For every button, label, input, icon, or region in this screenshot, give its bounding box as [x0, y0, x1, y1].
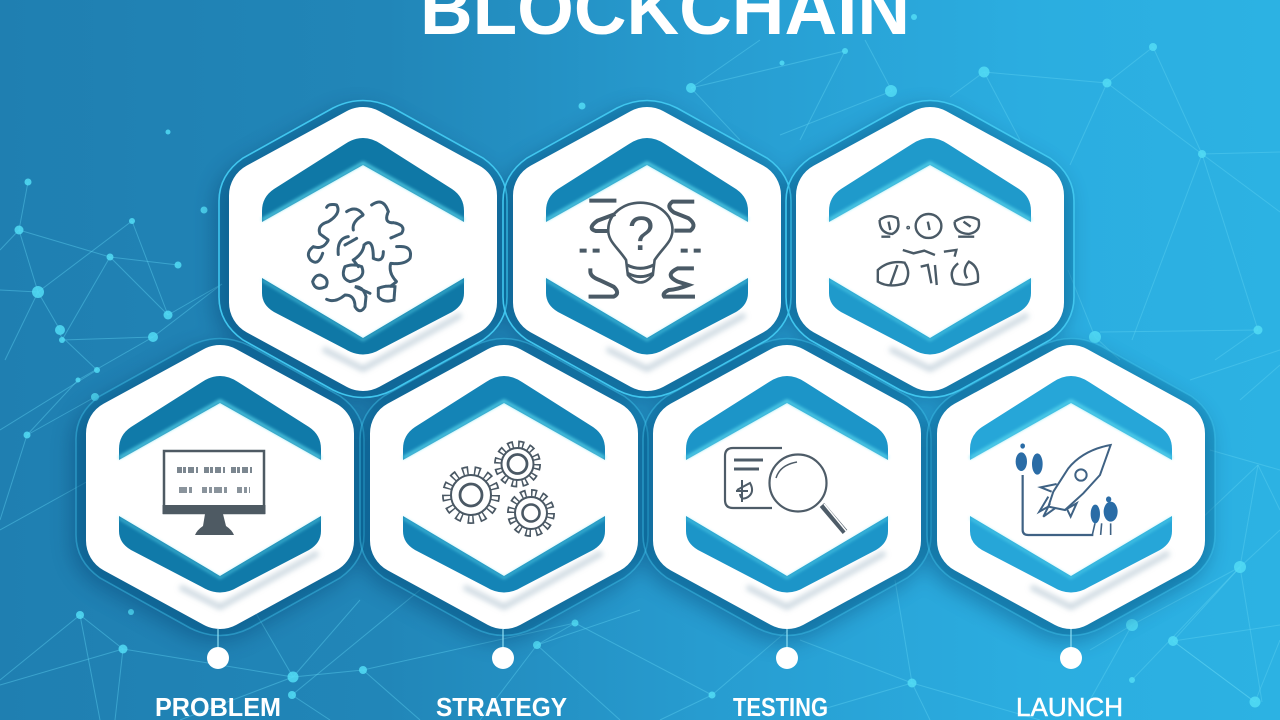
icon: document and magnifying glass: [725, 448, 847, 532]
connector: launch: [1060, 629, 1082, 669]
icon: three gears: [447, 445, 550, 532]
icon: tangled problem squiggle: [308, 202, 411, 311]
icon: group doodles: [878, 214, 979, 285]
panel: hexagon testing: [684, 376, 890, 607]
connector: testing: [776, 629, 798, 669]
hexagon drop shadows: [71, 108, 1210, 642]
icon: rocket launch: [1016, 443, 1118, 535]
icon: monitor: [162, 451, 266, 535]
panel: hexagon top middle: [544, 138, 750, 369]
icon text: question mark: ?: [628, 208, 654, 261]
panel: hexagon top left: [260, 138, 466, 369]
hexagon outlines: [76, 100, 1215, 636]
panel: hexagon top right: [827, 138, 1033, 369]
panel: hexagon strategy: [401, 376, 607, 607]
connector: strategy: [492, 629, 514, 669]
panel: hexagon problem: [117, 376, 323, 607]
icon: light bulb with question mark: [580, 201, 705, 297]
connector: problem: [207, 629, 229, 669]
panel: hexagon launch: [968, 376, 1174, 607]
